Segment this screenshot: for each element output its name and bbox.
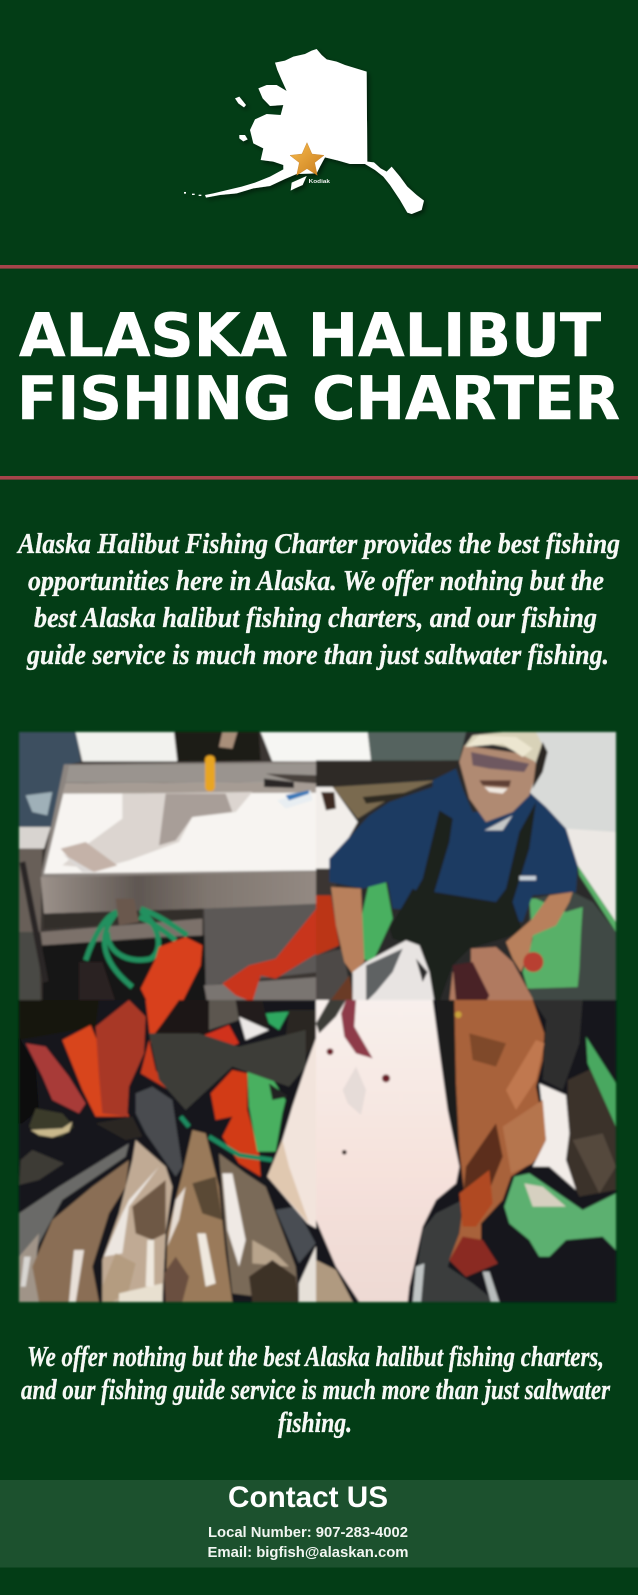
contact heading: Contact US: [228, 1481, 388, 1514]
boot: [29, 1108, 74, 1137]
Kodiak label: Kodiak: [309, 179, 331, 185]
phone number: Local Number: 907-283-4002: [208, 1525, 408, 1541]
photo bottom-left: rockfish and lingcod on deck: [19, 1000, 319, 1302]
title: [17, 301, 620, 434]
photo bottom-right: halibut and lingcod: [316, 1000, 616, 1302]
photo top-left: fish table and hose: [19, 732, 319, 1002]
contact band: [0, 1480, 638, 1568]
bottom divider: [0, 476, 638, 480]
photo: fisherman with halibut and catch on boat deck: [19, 732, 616, 1302]
photo top-right: fisherman: [316, 732, 616, 1002]
red rockfish on step: [222, 905, 319, 1002]
closing paragraph: [21, 1341, 611, 1439]
icon: Alaska map with star: [184, 49, 424, 214]
map landmass: [184, 49, 424, 214]
intro paragraph: [16, 528, 620, 671]
title line 1: ALASKA HALIBUT: [19, 301, 601, 371]
top divider: [0, 265, 638, 269]
red rockfish by hose: [141, 937, 202, 1002]
star marker: [290, 143, 324, 175]
email: Email: bigfish@alaskan.com: [208, 1545, 409, 1561]
green hose coil: [86, 909, 187, 987]
halibut head: [329, 940, 533, 1002]
closing paragraph: fishing.: [278, 1407, 352, 1439]
title line 2: FISHING CHARTER: [17, 364, 620, 434]
